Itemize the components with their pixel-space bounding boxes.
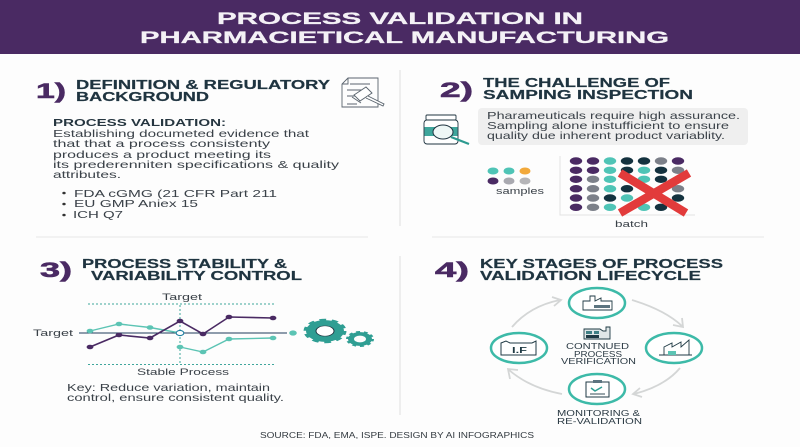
icon: bottle with magnifier bbox=[424, 115, 469, 144]
number 4: 4) bbox=[435, 259, 469, 282]
center building and label bbox=[561, 327, 636, 366]
samples dots bbox=[488, 168, 545, 196]
panel: challenge of sampling inspection bbox=[424, 76, 748, 229]
callout: pharmaceuticals need assurance: quality due inherent product variablity. bbox=[487, 130, 725, 142]
stage circle: left: I.F bbox=[512, 346, 527, 355]
icon: document with gavel bbox=[342, 78, 384, 107]
stage circle: bottom, monitoring bbox=[569, 374, 625, 404]
stage circle: top bbox=[569, 288, 625, 318]
heading 4: KEY STAGES OF PROCESS bbox=[480, 257, 723, 271]
callout: pharmaceuticals need assurance: Pharameuticals require high assurance. bbox=[487, 110, 740, 122]
definition text: its prederenniten specifications & quality bbox=[53, 159, 340, 171]
heading 2: SAMPING INSPECTION bbox=[483, 88, 693, 102]
heading 2: THE CHALLENGE OF bbox=[483, 76, 671, 90]
heading 2 bbox=[483, 76, 693, 102]
cycle arrows bbox=[508, 297, 683, 397]
key takeaway: control, ensure consistent quality. bbox=[67, 392, 284, 404]
title banner: PHARMACIETICAL MANUFACTURING bbox=[140, 28, 669, 47]
center building and label: CONTNUED bbox=[566, 341, 629, 351]
title banner: PROCESS VALIDATION IN bbox=[217, 9, 583, 28]
icon: gears bbox=[306, 320, 372, 346]
number 1: 1) bbox=[36, 80, 66, 103]
control chart bbox=[33, 292, 297, 377]
samples dots: samples bbox=[496, 186, 545, 196]
heading 3: VARIABILITY CONTROL bbox=[91, 269, 303, 283]
stage circle: right bbox=[646, 333, 702, 363]
callout: pharmaceuticals need assurance bbox=[478, 108, 748, 145]
control chart: Stable Process bbox=[137, 367, 230, 377]
title banner bbox=[0, 0, 800, 54]
panel: key stages of process validation lifecycle bbox=[435, 257, 723, 426]
regulation list: ICH Q7 bbox=[73, 209, 123, 221]
batch dot grid with red cross: batch bbox=[615, 219, 648, 229]
heading 1: DEFINITION & REGULATORY bbox=[76, 78, 331, 92]
number 2: 2) bbox=[440, 79, 473, 102]
source footer: SOURCE: FDA, EMA, ISPE. DESIGN BY AI INFOGRAPHICS bbox=[260, 431, 534, 440]
key takeaway: Key: Reduce variation, maintain bbox=[67, 382, 270, 394]
regulation list: EU GMP Aniex 15 bbox=[74, 198, 198, 210]
center building and label: VERIFICATION bbox=[561, 356, 636, 366]
definition text: produces a product meeting its bbox=[53, 149, 271, 161]
regulation list: FDA cGMG (21 CFR Part 211 bbox=[74, 188, 277, 200]
monitoring label: MONITORING & bbox=[557, 408, 640, 418]
heading 1: BACKGROUND bbox=[76, 90, 209, 104]
center building and label: PROCESS bbox=[574, 349, 622, 359]
definition text: attributes. bbox=[53, 169, 121, 181]
definition text: Establishing documeted evidence that bbox=[53, 128, 309, 140]
control chart: Target bbox=[162, 292, 203, 302]
batch dot grid with red cross bbox=[560, 156, 695, 229]
heading 3 bbox=[82, 257, 303, 283]
key takeaway bbox=[67, 382, 284, 404]
monitoring label: RE-VALIDATION bbox=[557, 416, 642, 426]
heading 1 bbox=[76, 78, 331, 104]
regulation list bbox=[62, 188, 277, 221]
stage circle: left bbox=[491, 333, 547, 363]
definition text: PROCESS VALIDATION: bbox=[53, 118, 226, 129]
heading 4: VALIDATION LIFECYCLE bbox=[480, 269, 701, 283]
panel: process stability and variability control bbox=[33, 257, 372, 404]
panel: definition and regulatory background bbox=[36, 78, 384, 221]
heading 3: PROCESS STABILITY & bbox=[82, 257, 287, 271]
definition text: that that a process consistenty bbox=[53, 138, 271, 150]
heading 4 bbox=[480, 257, 723, 283]
number 3: 3) bbox=[40, 259, 72, 282]
monitoring label bbox=[557, 408, 642, 426]
callout: pharmaceuticals need assurance: Sampling alone instufficient to ensure bbox=[487, 120, 729, 132]
definition text bbox=[53, 118, 340, 181]
control chart: Target bbox=[33, 328, 74, 338]
